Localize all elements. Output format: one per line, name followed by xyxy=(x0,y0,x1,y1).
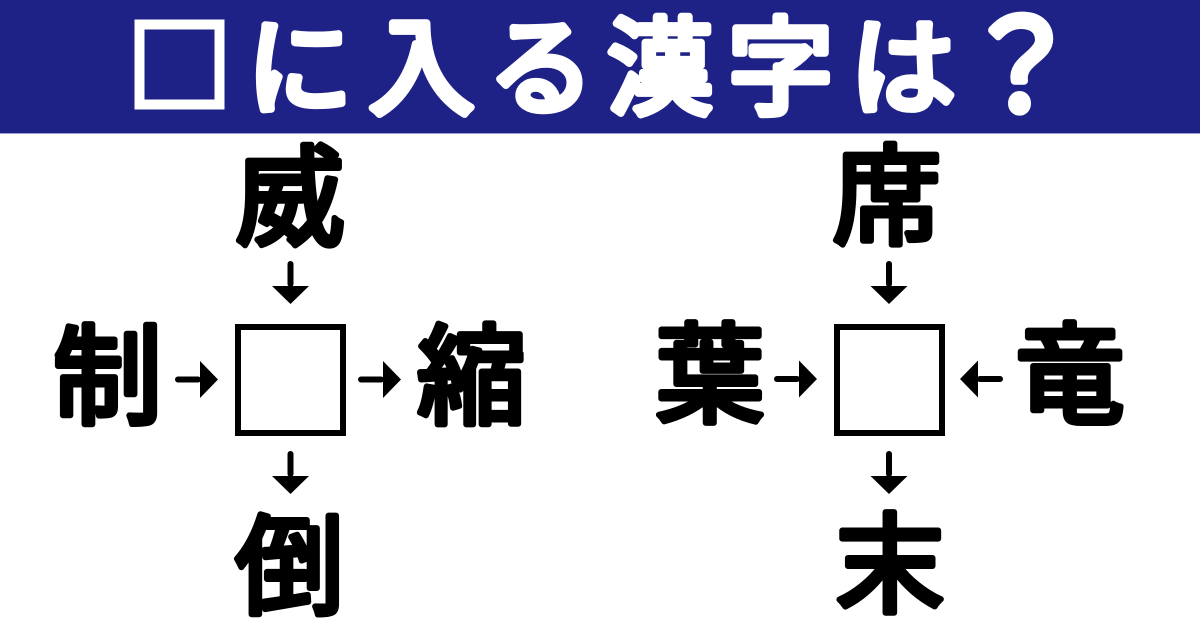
kanji left: 葉 xyxy=(656,316,764,438)
title text: は xyxy=(850,11,956,129)
kanji bottom: 末 xyxy=(836,506,944,628)
title text: る xyxy=(488,11,594,129)
arrow from left xyxy=(777,360,817,398)
arrow bottom xyxy=(870,454,908,494)
arrow to right xyxy=(361,361,401,398)
arrow from right xyxy=(960,360,1000,398)
title text: ？ xyxy=(962,0,1080,138)
kanji left: 制 xyxy=(53,318,162,440)
title banner xyxy=(0,0,1200,138)
puzzle left xyxy=(53,138,526,630)
puzzle right xyxy=(656,138,1124,628)
kanji bottom: 倒 xyxy=(235,508,344,630)
title text: に xyxy=(246,11,352,129)
title text: 字 xyxy=(728,11,834,129)
kanji top: 席 xyxy=(832,138,942,260)
title blank square icon xyxy=(140,24,220,104)
title text xyxy=(246,0,1080,138)
left answer box xyxy=(238,327,343,433)
right answer box xyxy=(837,327,942,433)
kanji top: 威 xyxy=(236,138,344,260)
title text: 入 xyxy=(368,11,474,129)
arrow top xyxy=(272,264,309,304)
kanji right: 竜 xyxy=(1016,316,1124,438)
arrow from left xyxy=(178,361,218,398)
arrow bottom xyxy=(272,454,309,494)
arrow top xyxy=(870,264,908,304)
kanji right: 縮 xyxy=(417,318,526,440)
title text: 漢 xyxy=(607,11,713,129)
